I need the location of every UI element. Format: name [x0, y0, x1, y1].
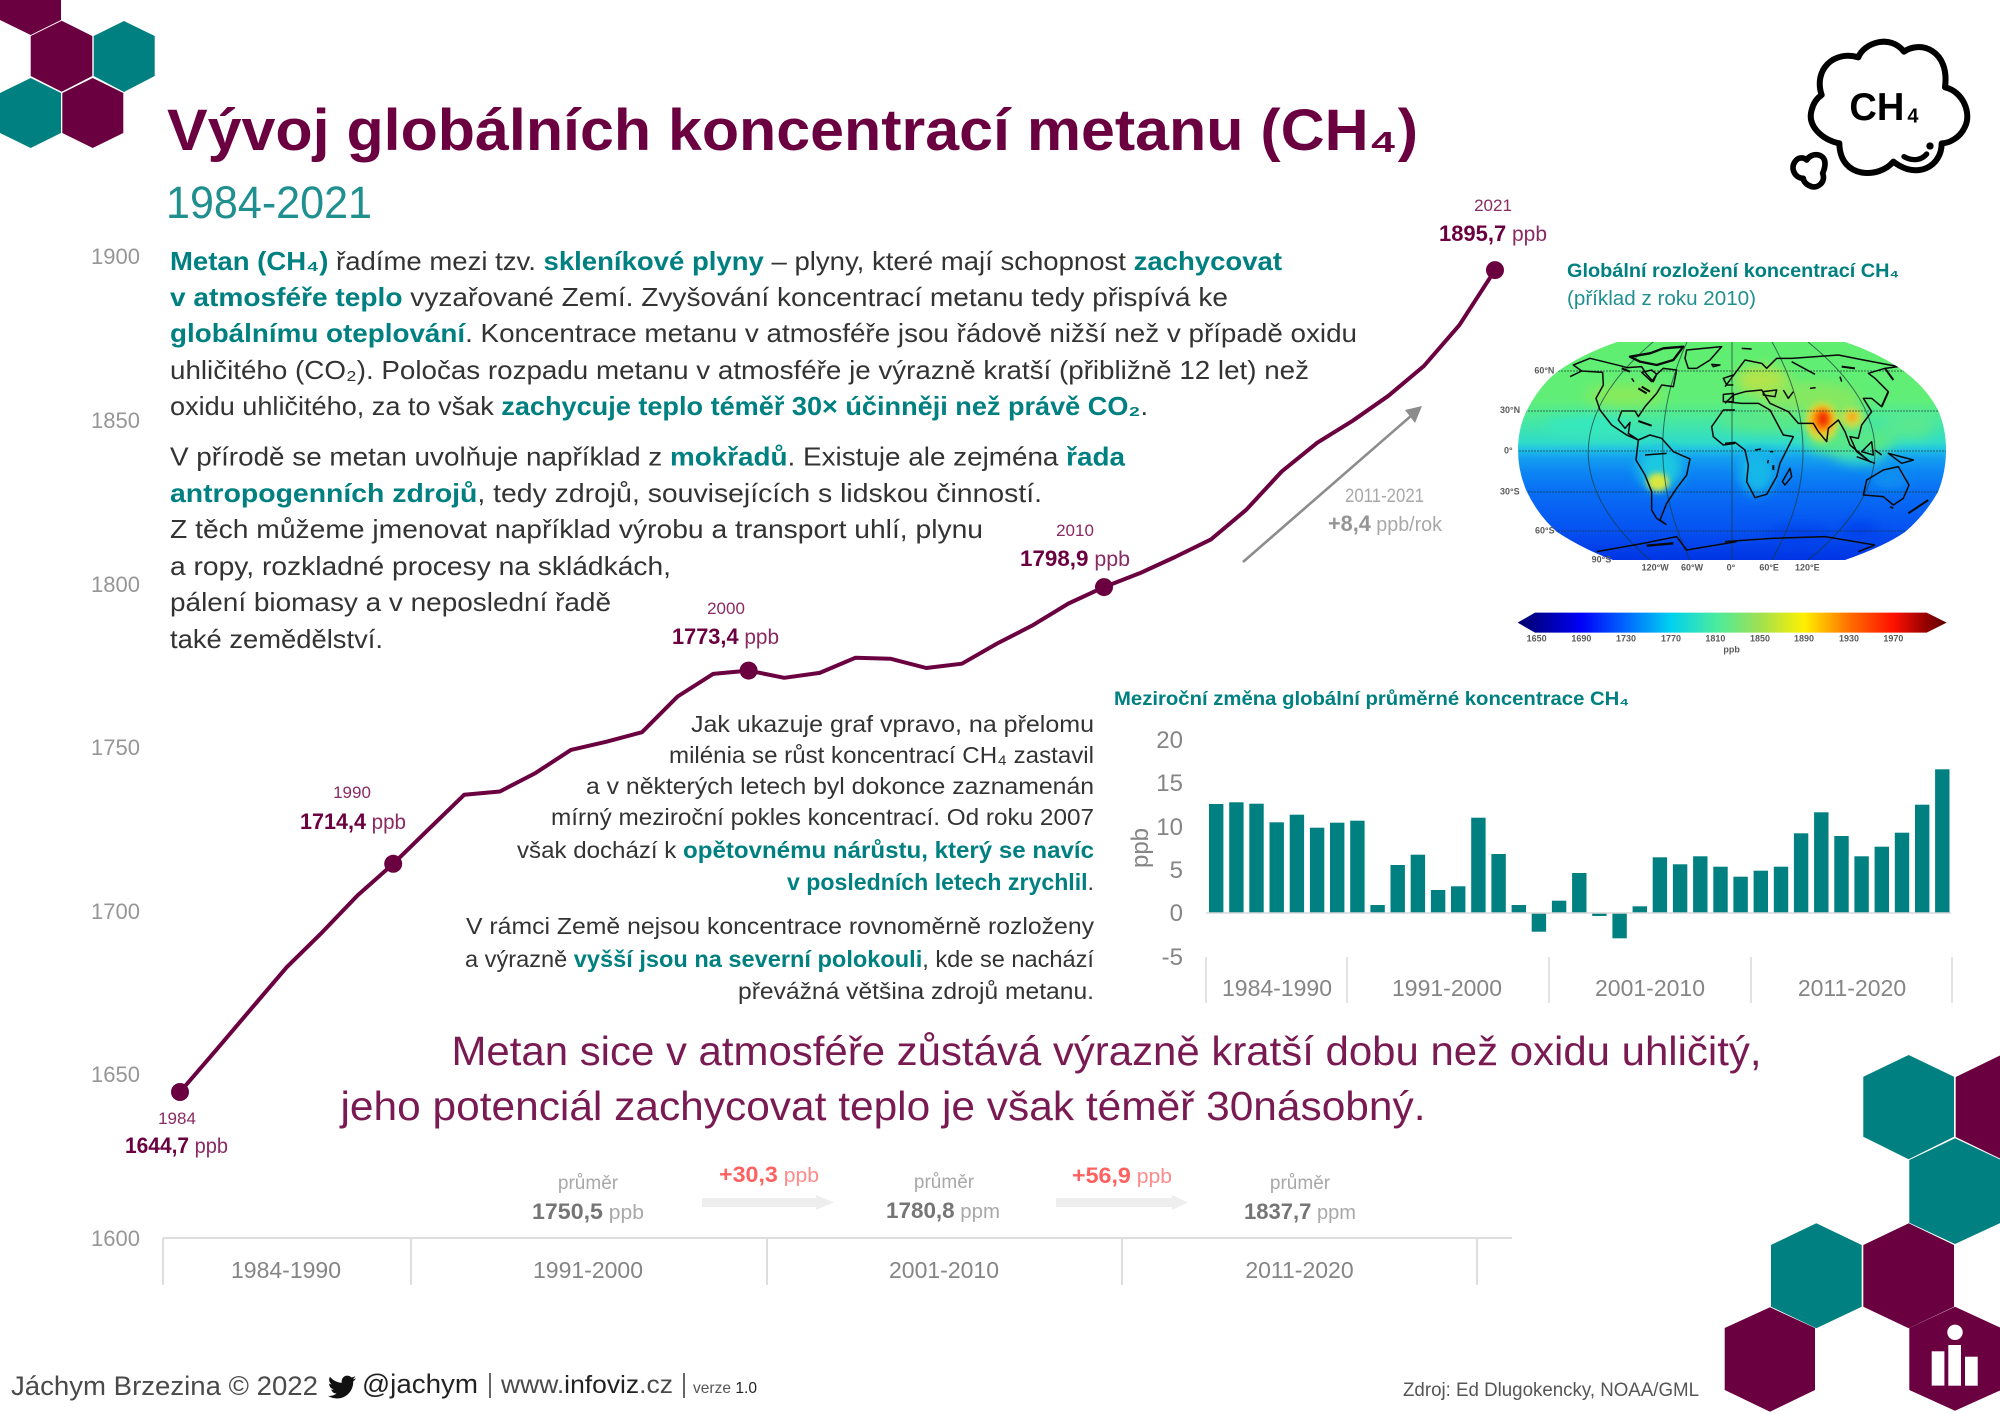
callout: jeho potenciál zachycovat teplo je však téměř 30násobný. [339, 1083, 1426, 1129]
colour scale legend: 1930 [1839, 634, 1859, 644]
y axis labels [91, 244, 140, 1251]
y axis labels: 1600 [91, 1226, 140, 1251]
map coordinate labels: 0° [1504, 446, 1513, 456]
intro paragraph about methane: globálnímu oteplování . Koncentrace metanu v atmosféře jsou řádově nižší než v případě oxidu [170, 318, 1357, 348]
bar chart heading: Meziroční změna globální průměrné koncentrace CH₄ [1114, 689, 1629, 710]
increase 2: +56,9 ppb [1072, 1163, 1172, 1188]
average 2011-2020: průměr [1270, 1173, 1331, 1194]
paragraph about methane sources: V přírodě se metan uvolňuje například z mokřadů . Existuje ale zejména řada [170, 442, 1126, 472]
map coordinate labels: 120°E [1795, 562, 1820, 572]
footer credits: www.infoviz.cz [500, 1371, 673, 1399]
hexagon cluster bottom right [1725, 1055, 2000, 1412]
map heading: (příklad z roku 2010) [1567, 288, 1756, 310]
map panel: global distribution [1500, 261, 1955, 654]
paragraph about spatial distribution [465, 913, 1095, 1004]
x axis period labels: 2011-2020 [1245, 1257, 1354, 1283]
label 2021 [1439, 196, 1547, 246]
increase 1 [702, 1162, 834, 1210]
paragraph about spatial distribution: převážná většina zdrojů metanu. [738, 978, 1094, 1004]
line chart: global methane concentration [91, 196, 1547, 1285]
paragraph about the stagnation around 2000: a v některých letech byl dokonce zaznamenán [586, 773, 1094, 799]
label 1984: 1984 [158, 1109, 196, 1128]
paragraph about methane sources: také zemědělství. [170, 624, 383, 654]
label 1990 [300, 783, 406, 834]
bar chart y axis: 10 [1156, 814, 1183, 841]
y axis labels: 1800 [91, 572, 140, 597]
label 2021: 2021 [1474, 196, 1512, 215]
colour scale legend [1518, 613, 1947, 654]
hexagon cluster top left [0, 0, 155, 148]
meridians and parallels [1510, 342, 1950, 560]
callout: Metan sice v atmosféře zůstává výrazně kratší dobu než oxidu uhličitý, [452, 1028, 1762, 1074]
footer credits: verze 1.0 [693, 1380, 757, 1397]
decade averages [532, 1162, 1356, 1224]
trend arrow 2011-2021 [1243, 406, 1422, 562]
paragraph about the stagnation around 2000 [517, 711, 1094, 895]
map coordinate labels: 120°W [1642, 562, 1669, 572]
label 2021: 1895,7 ppb [1439, 221, 1547, 246]
paragraph about the stagnation around 2000: milénia se růst koncentrací CH₄ zastavil [669, 742, 1094, 768]
map coordinate labels [1500, 366, 1820, 572]
x axis period labels: 1991-2000 [533, 1257, 643, 1283]
data point markers [171, 261, 1504, 1101]
bar chart period labels: 2011-2020 [1798, 975, 1906, 1001]
trend label: +8,4 ppb/rok [1328, 511, 1443, 536]
colour scale legend: 1970 [1883, 634, 1903, 644]
label 2000: 1773,4 ppb [672, 624, 779, 649]
colour scale legend: ppb [1723, 644, 1740, 654]
map heading [1567, 261, 1899, 310]
bar chart y axis: 5 [1170, 857, 1183, 884]
label 2000 [672, 599, 779, 649]
bar chart y axis: 15 [1156, 770, 1183, 797]
y axis labels: 1900 [91, 244, 140, 269]
bar chart period labels: 1984-1990 [1222, 975, 1332, 1001]
icon: infoviz hexagon logo [1909, 1307, 2000, 1411]
bars [1209, 769, 1950, 938]
paragraph about the stagnation around 2000: Jak ukazuje graf vpravo, na přelomu [691, 711, 1094, 737]
continents: Africa, Eurasia, Australia [1725, 348, 1928, 552]
paragraph about methane sources: Z těch můžeme jmenovat například výrobu a transport uhlí, plynu [170, 514, 983, 544]
world map [1500, 340, 1955, 572]
trend label [1328, 486, 1443, 536]
footer credits: @jachym [362, 1369, 478, 1399]
colour scale legend: 1690 [1571, 634, 1591, 644]
icon: CH4 cloud: CH [1849, 85, 1904, 129]
average 2001-2010: 1780,8 ppm [886, 1198, 1000, 1223]
x axis period labels [231, 1257, 1354, 1283]
colour scale legend: 1850 [1750, 634, 1770, 644]
bar chart y axis: 0 [1170, 900, 1183, 927]
average 2011-2020 [1244, 1173, 1356, 1224]
paragraph about the stagnation around 2000: však dochází k opětovnému nárůstu, který se navíc [517, 837, 1094, 863]
intro paragraph about methane: oxidu uhličitého, za to však zachycuje teplo téměř 30× účinněji než právě CO₂ . [170, 391, 1148, 421]
bar chart y axis: 20 [1156, 727, 1183, 754]
colour scale legend: 1650 [1527, 634, 1547, 644]
paragraph about spatial distribution: a výrazně vyšší jsou na severní polokouli , kde se nachází [465, 946, 1095, 972]
x axis with period dividers [163, 1238, 1512, 1285]
colour scale legend: 1810 [1705, 634, 1725, 644]
icon: twitter bird [328, 1376, 356, 1398]
map coordinate labels: 30°S [1500, 486, 1520, 496]
x axis period labels: 2001-2010 [889, 1257, 999, 1283]
y axis labels: 1650 [91, 1062, 140, 1087]
label 1984: 1644,7 ppb [125, 1133, 228, 1158]
map coordinate labels: 60°N [1534, 366, 1554, 376]
paragraph about methane sources: a ropy, rozkladné procesy na skládkách, [170, 551, 671, 581]
y axis unit: ppb [1127, 828, 1154, 868]
intro paragraph about methane: uhličitého (CO₂). Poločas rozpadu metanu v atmosféře je výrazně kratší (přibližně 12 let) než [170, 355, 1309, 385]
average 1991-2000 [532, 1173, 644, 1224]
paragraph about the stagnation around 2000: v posledních letech zrychlil. [787, 869, 1094, 895]
map heading: Globální rozložení koncentrací CH₄ [1567, 261, 1899, 282]
map coordinate labels: 60°S [1535, 526, 1555, 536]
paragraph about methane sources: pálení biomasy a v neposlední řadě [170, 587, 611, 617]
colour scale legend: 1770 [1661, 634, 1681, 644]
label 1990: 1714,4 ppb [300, 809, 406, 834]
average 2011-2020: 1837,7 ppm [1244, 1199, 1356, 1224]
source note: Zdroj: Ed Dlugokencky, NOAA/GML [1403, 1380, 1699, 1401]
y axis labels: 1700 [91, 899, 140, 924]
bar chart period labels: 2001-2010 [1595, 975, 1705, 1001]
icon: CH4 cloud: 4 [1907, 106, 1918, 128]
subtitle: years: 1984-2021 [166, 177, 372, 228]
increase 2 [1056, 1163, 1188, 1210]
footer credits [11, 1369, 757, 1401]
trend label: 2011-2021 [1345, 486, 1424, 507]
paragraph about the stagnation around 2000: mírný meziroční pokles koncentrací. Od roku 2007 [551, 804, 1094, 830]
bar chart y axis: -5 [1162, 944, 1183, 971]
average 1991-2000: 1750,5 ppb [532, 1199, 644, 1224]
map coordinate labels: 60°E [1759, 562, 1779, 572]
bar chart period labels: 1991-2000 [1392, 975, 1502, 1001]
bar chart period labels [1222, 975, 1906, 1001]
paragraph about methane sources [170, 442, 1126, 654]
map coordinate labels: 60°W [1681, 562, 1704, 572]
bar chart: year on year change [1114, 689, 1952, 1003]
label 2010: 2010 [1056, 521, 1094, 540]
x axis period labels: 1984-1990 [231, 1257, 341, 1283]
y axis labels: 1750 [91, 735, 140, 760]
average 2001-2010: průměr [914, 1172, 975, 1193]
label 2000: 2000 [707, 599, 745, 618]
map coordinate labels: 90°S [1592, 554, 1611, 564]
label 1984 [125, 1109, 228, 1158]
intro paragraph about methane [170, 246, 1357, 421]
icon: CH4 cloud [1793, 42, 1967, 187]
colour scale legend: 1890 [1794, 634, 1814, 644]
increase 1: +30,3 ppb [719, 1162, 819, 1187]
map coordinate labels: 30°N [1500, 405, 1520, 415]
callout [339, 1028, 1762, 1129]
paragraph about spatial distribution: V rámci Země nejsou koncentrace rovnoměrně rozloženy [466, 913, 1095, 939]
continents: Americas [1570, 347, 1737, 552]
y axis labels: 1850 [91, 408, 140, 433]
average 1991-2000: průměr [558, 1173, 619, 1194]
intro paragraph about methane: v atmosféře teplo vyzařované Zemí. Zvyšování koncentrací metanu tedy přispívá ke [170, 282, 1228, 312]
map coordinate labels: 0° [1727, 562, 1736, 572]
concentration line [180, 270, 1495, 1092]
average 2001-2010 [886, 1172, 1000, 1223]
paragraph about methane sources: antropogenních zdrojů , tedy zdrojů, souvisejících s lidskou činností. [170, 478, 1042, 508]
intro paragraph about methane: Metan (CH₄) řadíme mezi tzv. skleníkové plyny – plyny, které mají schopnost zachycovat [170, 246, 1282, 276]
title: Vývoj globálních koncentrací metanu (CH₄) [167, 98, 1418, 163]
label 2010: 1798,9 ppb [1020, 546, 1130, 571]
label 1990: 1990 [333, 783, 371, 802]
colour scale legend: 1730 [1616, 634, 1636, 644]
bar chart y axis [1156, 727, 1183, 971]
footer credits: Jáchym Brzezina © 2022 [11, 1371, 318, 1401]
label 2010 [1020, 521, 1130, 571]
